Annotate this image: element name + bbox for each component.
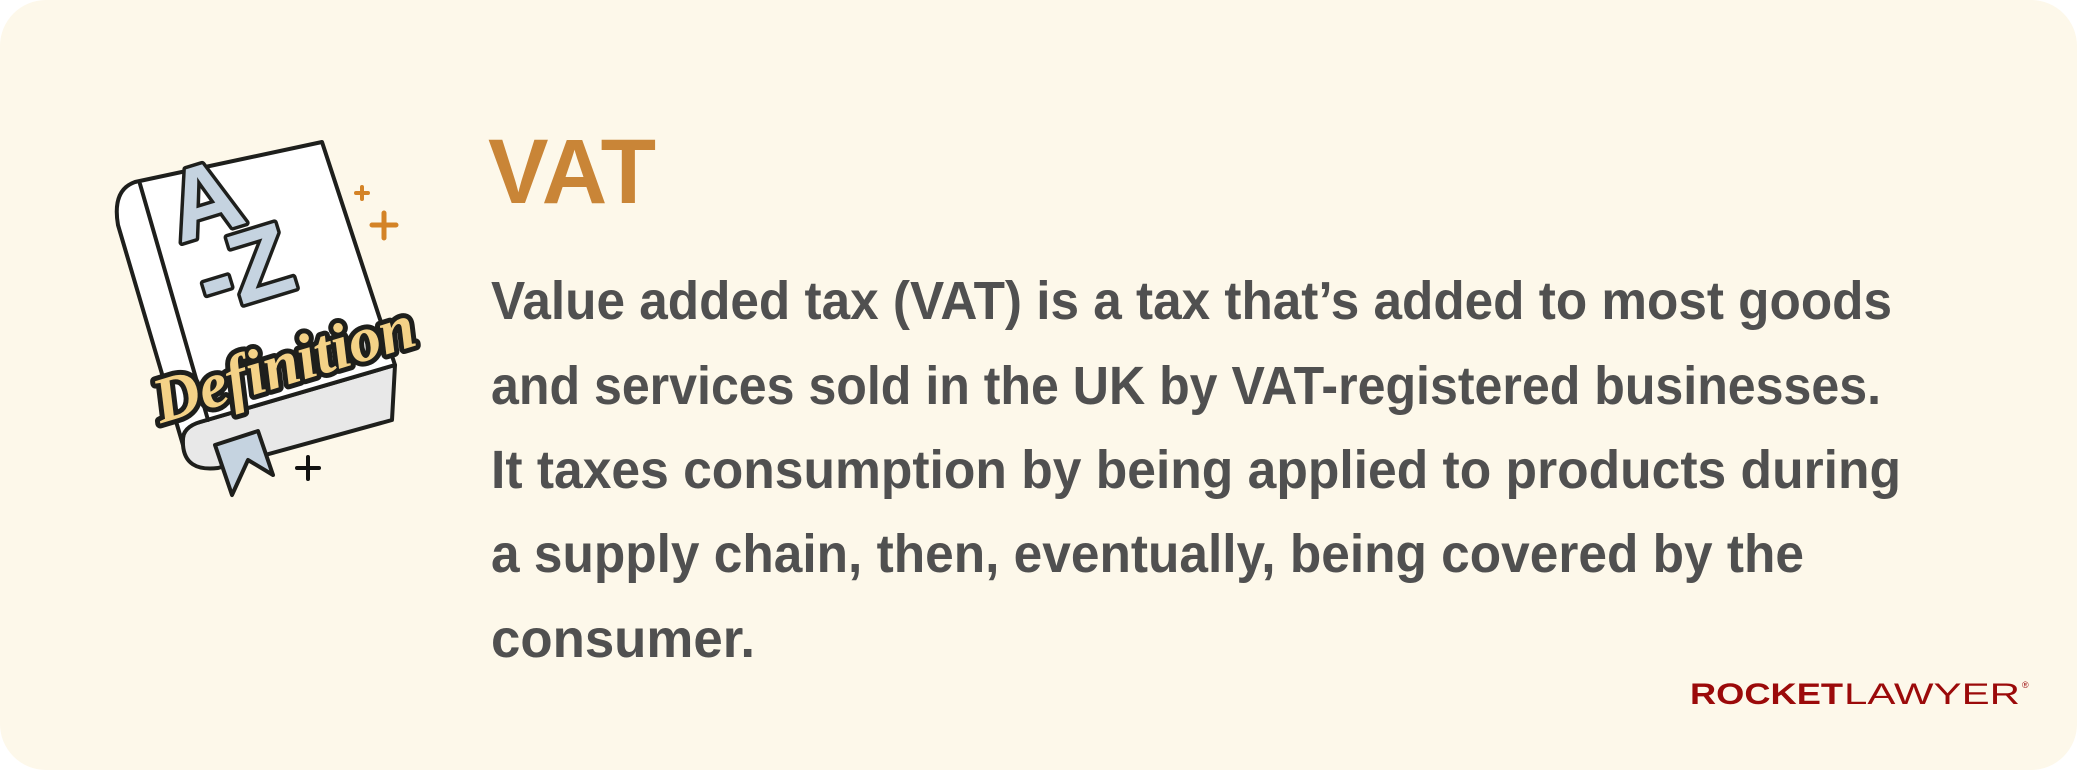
- letters A-Z: -Z: [183, 201, 306, 336]
- letters A-Z: [153, 128, 306, 338]
- icon: A-Z definition book: [117, 128, 423, 495]
- page block: [183, 365, 395, 469]
- letters A-Z: A: [153, 136, 255, 264]
- bookmark: [215, 431, 273, 495]
- text block: definition: a supply chain, then, eventually, being covered by the: [491, 524, 1804, 584]
- text block: definition: [491, 271, 1901, 669]
- cover: [117, 142, 395, 445]
- cursive word Definition: Definition: [143, 290, 423, 437]
- logo: Rocket Lawyer: ROCKET: [1690, 678, 1843, 711]
- text block: definition: and services sold in the UK by VAT-registered businesses.: [491, 356, 1881, 416]
- logo: Rocket Lawyer: LAWYER: [1844, 678, 2020, 711]
- logo: Rocket Lawyer: [1690, 678, 2029, 711]
- spine line: [140, 184, 208, 420]
- title: VAT: [488, 121, 656, 223]
- text block: definition: It taxes consumption by being applied to products during: [491, 440, 1901, 500]
- sparkles: [356, 187, 396, 238]
- text block: definition: consumer.: [491, 609, 755, 669]
- text block: definition: Value added tax (VAT) is a tax that’s added to most goods: [491, 271, 1892, 331]
- logo: Rocket Lawyer: ®: [2022, 680, 2029, 690]
